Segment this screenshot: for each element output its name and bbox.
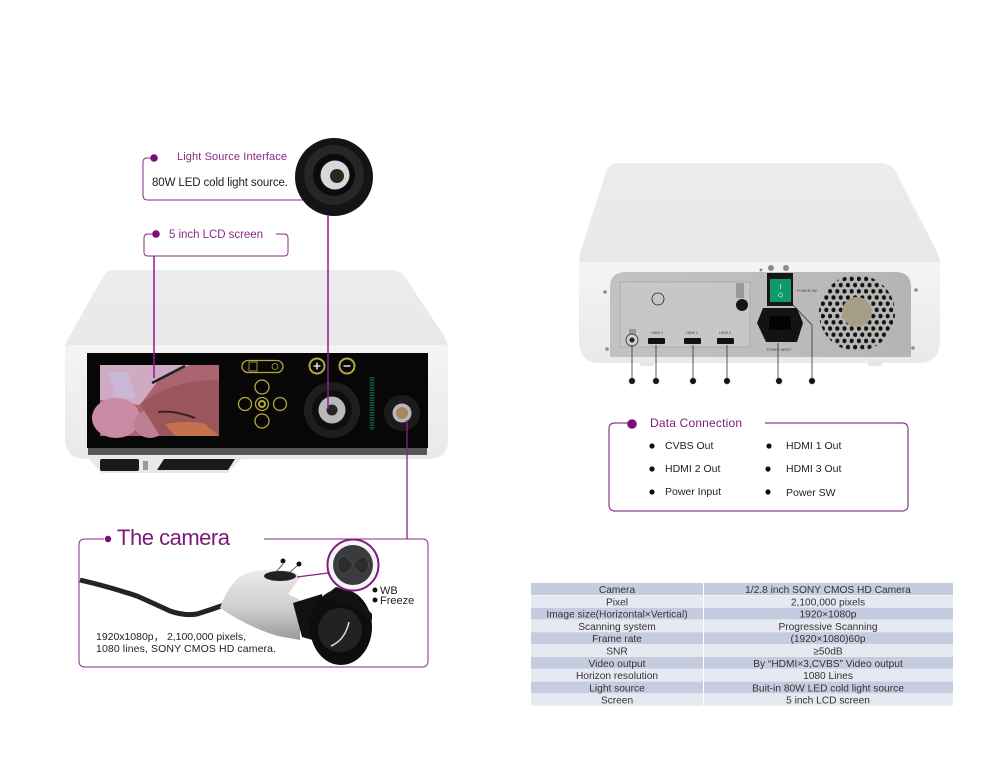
specification table: 2,100,000 pixels: [791, 597, 865, 608]
HDMI ports: HDMI 3: [719, 331, 731, 335]
HDMI ports: HDMI 1: [651, 331, 663, 335]
specification table: Light source: [589, 683, 645, 694]
leader line: camera connector: [406, 420, 408, 539]
light source port: [304, 382, 360, 438]
panel: the camera: [79, 525, 428, 667]
camera description: 1920x1080p， 2,100,000 pixels,: [96, 631, 246, 643]
heading: Data Connection: [650, 416, 742, 430]
specification table: 1/2.8 inch SONY CMOS HD Camera: [745, 585, 911, 596]
panel screws: [603, 265, 918, 351]
label: 5 inch LCD screen: [169, 229, 263, 241]
specification table: Buit-in 80W LED cold light source: [752, 683, 904, 694]
camera connector: [384, 395, 420, 431]
small markers on camera: [276, 558, 302, 573]
camera coupler: [293, 587, 372, 665]
icon: light port close-up: [295, 138, 373, 216]
connection list: [649, 440, 842, 499]
connection list: CVBS Out: [665, 440, 714, 452]
specification table: Frame rate: [592, 634, 642, 645]
callout: light source interface: [143, 151, 305, 200]
heading: Light Source Interface: [177, 151, 287, 163]
connection list: Power Input: [665, 486, 721, 498]
control buttons: [238, 358, 354, 428]
specification table: Camera: [599, 585, 635, 596]
specification table: Screen: [601, 696, 633, 707]
rear metal panel: [610, 272, 911, 357]
connection list: HDMI 2 Out: [665, 463, 721, 475]
button legend: WB: [380, 585, 398, 597]
connection list: HDMI 1 Out: [786, 440, 842, 452]
button close-up: [297, 540, 378, 590]
rear top surface: [579, 163, 940, 266]
power switch: POWER SW: [797, 289, 818, 293]
bullet: [105, 536, 111, 542]
specification table: By “HDMI×3,CVBS” Video output: [753, 659, 903, 670]
specification table: 1080 Lines: [803, 671, 853, 682]
power inlet: [757, 308, 803, 352]
connector leaders and number markers: [629, 305, 815, 384]
specification table: Pixel: [606, 597, 628, 608]
button legend: Freeze: [380, 595, 414, 607]
specification table: [531, 583, 953, 707]
leader line: light source to port: [327, 215, 329, 409]
specification table: 5 inch LCD screen: [786, 696, 870, 707]
connection list: HDMI 3 Out: [786, 463, 842, 475]
knob: [736, 283, 748, 311]
panel: data connection: [609, 416, 908, 511]
front device: [65, 270, 448, 473]
fan grille: [819, 275, 895, 351]
specification table: Progressive Scanning: [778, 622, 878, 633]
connection list: Power SW: [786, 487, 836, 499]
bullet: [150, 154, 158, 162]
device feet: [88, 458, 242, 473]
camera description: 1080 lines, SONY CMOS HD camera.: [96, 643, 276, 655]
bullet: [152, 230, 160, 238]
green level bar: [370, 377, 374, 430]
device top surface: [65, 270, 448, 350]
HDMI ports: HDMI 2: [686, 331, 698, 335]
leader line: LCD: [153, 256, 155, 378]
rear body: [579, 262, 940, 363]
specification table: 1920×1080p: [800, 610, 857, 621]
rear device: [579, 163, 940, 384]
button legend: [372, 585, 414, 607]
specification table: Scanning system: [578, 622, 656, 633]
specification table: SNR: [606, 646, 628, 658]
specification table: (1920×1080)60p: [790, 634, 866, 645]
control panel: [87, 353, 428, 448]
specification table: Horizon resolution: [576, 671, 658, 682]
camera cable: [80, 580, 224, 615]
bullet: [627, 419, 637, 429]
power switch: [767, 273, 818, 306]
specification table: Video output: [588, 659, 646, 670]
callout: 5 inch LCD screen: [144, 229, 288, 256]
specification table: Image size(Horizontal×Vertical): [546, 610, 688, 621]
specification table: ≥50dB: [813, 646, 843, 658]
CVBS connector: [626, 329, 638, 346]
device front body: [65, 345, 448, 459]
camera body: [220, 570, 300, 640]
power inlet: POWER INPUT: [767, 348, 792, 352]
HDMI ports: [648, 331, 734, 344]
heading: The camera: [117, 525, 231, 550]
description: 80W LED cold light source.: [152, 177, 288, 189]
LCD screen: [92, 365, 219, 438]
